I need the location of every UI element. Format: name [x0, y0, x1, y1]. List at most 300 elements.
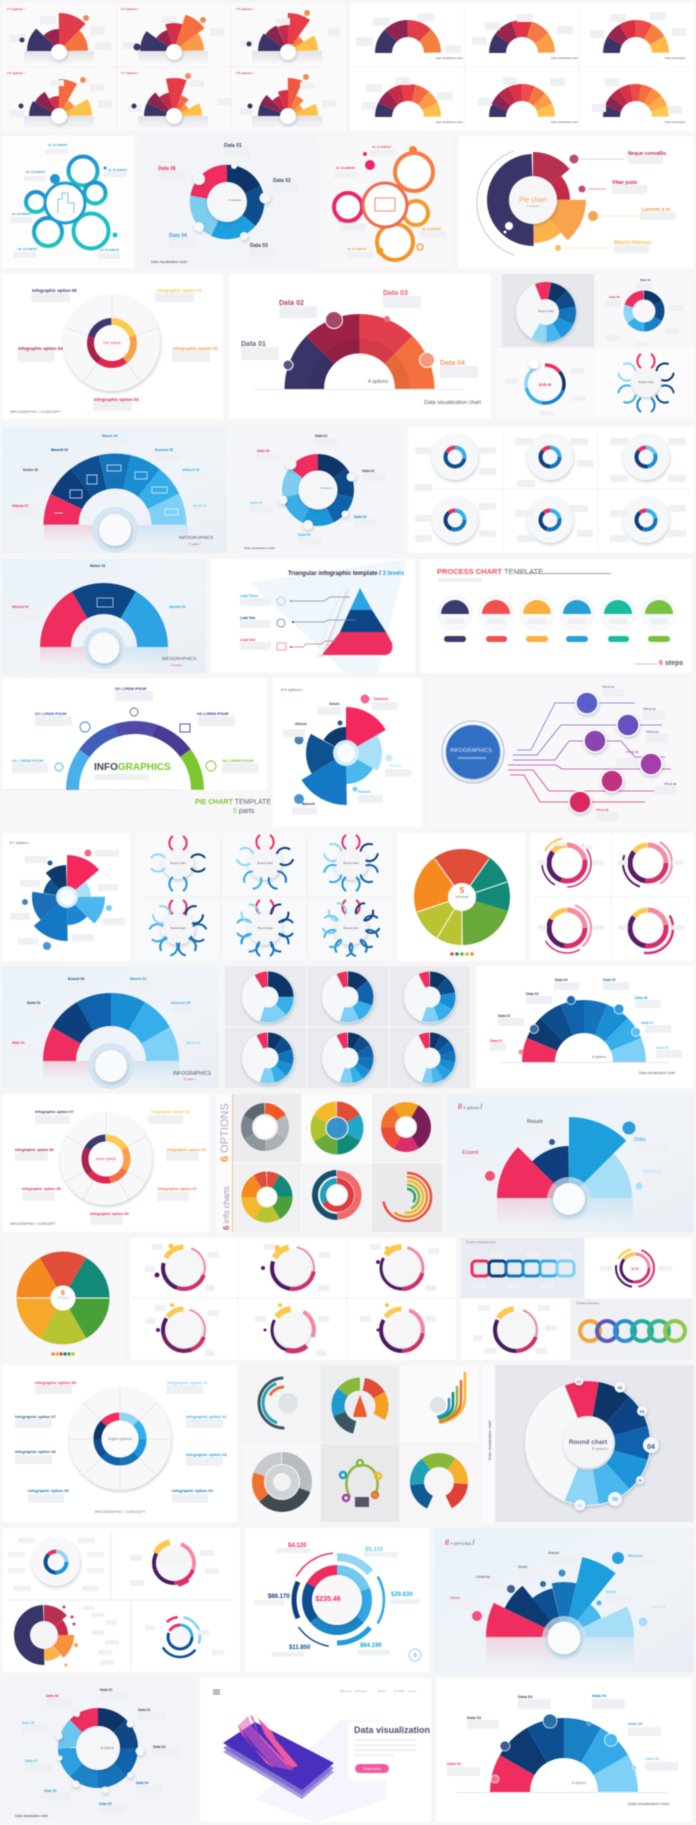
panel: seven part round chart: Data 01	[315, 434, 328, 438]
ring chart 5	[272, 1309, 314, 1351]
panel: four option big rose: // 4 options /	[458, 1104, 482, 1111]
panel: eight option round chart: Data 08	[22, 1721, 35, 1725]
rose chart: 7 options	[155, 97, 193, 135]
panel: pie chart template five parts: 01/ LOREM IPSUM	[12, 759, 43, 763]
panel: seven option big rose: // 7 OPTIONS /	[445, 1540, 474, 1547]
panel: orange bubble diagram: 00. ELEMENT	[336, 166, 356, 170]
panel: six rose half charts: // 6 options /	[7, 71, 25, 75]
panel: radial value chart: $64.190	[360, 1643, 382, 1649]
panel: six part round chart: Data 06	[158, 166, 176, 172]
panel: eight option half donut: Data 02	[498, 1014, 511, 1018]
panel: infographic flow tree: TITLE 04	[626, 750, 639, 754]
chart: gray segments	[246, 1108, 284, 1146]
panel: six part half donut with icons: Morbi 06	[186, 1041, 200, 1045]
half donut: 8 segments	[612, 92, 660, 142]
round chart 4 options	[330, 979, 366, 1015]
panel: six half donuts: Data visualization	[665, 56, 686, 60]
panel: round chart seven options: 06	[612, 1497, 618, 1503]
panel: eight option half donut: 8 options	[592, 1055, 606, 1059]
panel: four multi ring charts	[530, 833, 694, 961]
panel: radial value chart: 6	[413, 1653, 417, 1659]
panel: coloured rings chain	[571, 1299, 692, 1360]
panel: seven part half donut with icons: Affluent 06	[182, 468, 200, 472]
panel: ring chart single	[585, 1238, 692, 1298]
chart: globe segments	[318, 1110, 356, 1146]
panel: eight option circle concept: Infographic option 07	[15, 1414, 56, 1419]
panel: six option half donut: 6 options	[572, 1781, 586, 1785]
panel: three part half donut: Nassib 03	[169, 605, 185, 609]
panel: eight option half donut: Data 07	[641, 1021, 654, 1025]
ring chart 2	[272, 1247, 314, 1289]
panel: five option circle concept: Infographic option 02	[173, 346, 218, 351]
multi ring chart 1	[542, 838, 592, 888]
panel: triangular infographic: Lead Three	[240, 594, 258, 598]
panel: six part round chart: Data visualization chart	[151, 260, 187, 264]
panel: six part half donut with icons: Nibh 01	[12, 1041, 25, 1045]
panel: four small chart variants	[2, 1528, 240, 1672]
panel: six option donut small: Data 01	[640, 278, 651, 282]
panel: five option circle concept: INFOGRAPHIC / CONCEPT	[10, 409, 61, 414]
ring: 5 arcs	[236, 835, 294, 891]
panel: four option big rose: Eissent	[462, 1150, 479, 1156]
panel: three part half donut	[2, 559, 206, 696]
panel: eight option circle concept: Infographic option 06	[15, 1449, 56, 1454]
panel: data visualization landing page: Services	[355, 1689, 367, 1693]
donut: option 5	[636, 448, 656, 466]
donut: option 8	[636, 510, 656, 530]
panel: seven part round chart: 6 options	[320, 486, 333, 490]
panel: orange bubble diagram: 00. ELEMENT	[372, 145, 392, 149]
panel: six part half donut with icons: Nulla 02	[27, 1001, 40, 1005]
panel: data visualization landing page: About us	[340, 1689, 352, 1693]
panel: radial value chart: $11.850	[289, 1645, 311, 1651]
chart: petals	[249, 1179, 285, 1215]
flow nodes	[569, 692, 662, 813]
panel: pie chart template five parts: 5 parts	[233, 808, 255, 815]
panel: five option circle concept: Infographic option 01	[157, 288, 202, 293]
half donut: 6 segments warm	[384, 92, 432, 142]
panel: six option donut small: Data 06	[609, 295, 620, 299]
rose chart: 6 options	[269, 32, 307, 70]
mini blue rings	[160, 1617, 200, 1657]
panel: pie chart template five parts: 02/ LOREM IPSUM	[35, 712, 66, 716]
panel: seven part round chart: Data 04	[298, 533, 311, 537]
panel: orange bubble diagram: 00. ELEMENT	[338, 219, 358, 223]
panel: seven part half donut with icons: Morbi 07	[193, 504, 207, 508]
half donut: 4 segments	[384, 28, 432, 78]
panel: pie chart template five parts: INFOGRAPHICS	[94, 762, 171, 773]
panel: six infographic vector charts: 6 info charts	[222, 1186, 231, 1230]
ring: 8 arcs	[237, 900, 293, 956]
panel: eight option circle concept: Eight options	[108, 1436, 132, 1441]
panel: four option half donut: Data visualization chart	[424, 400, 481, 406]
panel: radial value chart: $29.830	[391, 1592, 413, 1598]
multi ring chart 3	[542, 903, 592, 953]
panel: eight option circle concept: Infographic option 01	[167, 1380, 208, 1385]
panel: infographic flow tree: TITLE 06	[596, 808, 609, 812]
panel: three part half donut: Athena 01	[12, 605, 29, 609]
panel: six half donuts: Data visualization chart	[436, 56, 463, 60]
panel: four option half donut	[229, 274, 491, 444]
panel: pie chart with callouts: Vitae justo	[612, 180, 637, 186]
pyramid	[317, 588, 392, 655]
panel: six half donuts: Data visualization chart	[551, 56, 578, 60]
panel: six half donuts: Data visualization chart	[551, 120, 578, 124]
panel: eight option circle concept: Infographic option 05	[28, 1488, 69, 1493]
panel: data visualization landing page: Data visualization	[354, 1725, 430, 1735]
panel: seven part round chart	[233, 427, 402, 553]
panel: six rose half charts	[2, 3, 350, 135]
panel: process chart template: 6 steps	[659, 660, 683, 667]
panel: five option petal circle	[397, 833, 525, 961]
panel: data visualization landing page: Read more	[363, 1767, 381, 1771]
panel: round chart seven options: Round chart	[569, 1439, 608, 1446]
panel: seven part half donut with icons: Atlanta 01	[12, 504, 28, 508]
panel: seven part half donut with icons: / 7 parts /	[188, 542, 201, 546]
donut chart	[198, 174, 256, 230]
panel: pie chart with callouts	[458, 136, 694, 268]
panel: five option circle concept: Five options	[103, 341, 121, 345]
ring chart 3	[381, 1247, 423, 1289]
panel: arc ring chart small: Round chart	[638, 380, 654, 384]
chart: dark rings with map	[259, 1378, 309, 1428]
donut: option 7	[540, 510, 560, 530]
panel: pie chart template five parts: 03/ LOREM IPSUM	[115, 687, 146, 691]
chart: gear	[258, 1458, 306, 1506]
panel: six part half donut with icons: Essent 03	[68, 977, 84, 981]
panel: round chart seven options: Data visualization chart	[488, 1420, 492, 1460]
panel: seven part round chart: Data visualization chart	[244, 546, 275, 550]
panel: six option circle concept: INFOGRAPHIC / CONCEPT	[10, 1222, 56, 1226]
panel: chain links	[461, 1238, 584, 1298]
panel: pie chart with callouts: Mauris rhoncus	[614, 240, 651, 246]
panel: eight option circle concept: INFOGRAPHIC / CONCEPT	[95, 1509, 146, 1514]
panel: six option circle concept: Infographic option 01	[151, 1110, 190, 1114]
panel: round chart seven options: 03	[640, 1409, 645, 1414]
half donut: 5 segments	[498, 28, 546, 78]
panel: six part round chart: Data 01	[224, 143, 242, 149]
panel: eight option circle concept	[2, 1365, 237, 1522]
panel: eight option half donut: Data 06	[635, 996, 648, 1000]
panel: six option half donut: Data 01	[447, 1761, 462, 1766]
panel: eight option round chart: Data 02	[138, 1708, 151, 1712]
donut: option 4	[540, 448, 560, 466]
panel: round chart seven options: 05	[638, 1478, 642, 1482]
panel: seven option big rose: Mensum	[628, 1553, 644, 1558]
panel: thin ring chart small: $235.46	[539, 383, 551, 387]
multi ring chart 2	[623, 838, 673, 888]
panel: eight option round chart: Data 07	[25, 1759, 38, 1763]
panel: six option half donut: Data visualization chart	[628, 1801, 670, 1806]
chart: warm segments	[388, 1109, 424, 1145]
rose chart: 5 options	[155, 32, 193, 70]
panel: chain links: Template infographic chain	[466, 1241, 496, 1244]
panel: eight option round chart: Data 04	[136, 1781, 149, 1785]
mini purple ring	[153, 1542, 195, 1584]
panel: six part half donut with icons	[2, 966, 219, 1112]
panel: eight option round chart: Data 01	[100, 1688, 113, 1692]
half donut: 6 segments	[612, 28, 660, 78]
mini eight option circle	[8, 1538, 104, 1591]
panel: eight option round chart: Data 08	[46, 1694, 59, 1698]
panel: process chart template	[420, 559, 692, 673]
panel: six ring arc variants: Round chart	[343, 861, 359, 865]
panel: seven part round chart: Data 02	[362, 469, 375, 473]
rose donut	[506, 174, 560, 226]
panel: infographic flow tree: TITLE 02	[643, 707, 656, 711]
panel: six ring arc variants: Round chart	[343, 926, 359, 930]
panel: eight option half donut: Data 03	[526, 992, 539, 996]
panel: seven option big rose: Mollis	[606, 1589, 616, 1594]
panel: six option circle concept: Infographic option 05	[22, 1187, 61, 1191]
panel: six rose half charts: // 6 options /	[236, 7, 254, 11]
panel: seven part half donut with icons: Mauris 04	[102, 434, 118, 438]
panel: eight option half donut: Data 05	[603, 978, 616, 982]
donut: option 6	[446, 510, 464, 530]
panel: six ring arc variants: Round chart	[257, 926, 273, 930]
panel: pie chart template five parts	[2, 678, 271, 852]
panel: blue bubble diagram: 00. ELEMENT	[12, 212, 32, 216]
panel: five option circle concept: Infographic option 03	[94, 397, 139, 402]
panel: triangular infographic: Triangular infographic template / 3 levels	[288, 571, 405, 577]
panel: eight option half donut: Data 08	[656, 1046, 669, 1050]
panel: six option rose: Athens	[295, 722, 307, 726]
round chart 5 options	[412, 979, 448, 1015]
panel: six part round chart: Data 04	[169, 233, 187, 239]
panel: five option circle concept: Infographic option 04	[18, 346, 63, 351]
panel: five option circle concept: Infographic option 05	[32, 288, 77, 293]
panel: radial value chart: $5.110	[365, 1547, 384, 1553]
panel: pie chart with callouts: 4 options	[527, 204, 540, 208]
panel: six rose half charts: // 7 options /	[121, 71, 139, 75]
panel: six infographic vector charts	[215, 1094, 442, 1232]
donut: option 3	[446, 448, 464, 466]
panel: pie chart template five parts: 04/ LOREM IPSUM	[197, 712, 228, 716]
ring: 9 arcs	[322, 900, 380, 957]
panel: six option half donut: Data 05	[628, 1721, 643, 1726]
panel: six infographic vector charts: 6 OPTIONS	[219, 1103, 231, 1162]
chart: world map donut	[417, 1460, 461, 1504]
bubble rings	[26, 156, 108, 248]
panel: round chart seven options: 01	[577, 1380, 581, 1384]
panel: six part half donut with icons: Mauris 04	[130, 977, 146, 981]
panel: eight option round chart: Data 06	[44, 1789, 57, 1793]
panel: round chart seven options: 07	[578, 1503, 583, 1508]
connector lines	[508, 703, 671, 802]
panel: five option circle concept	[2, 274, 223, 419]
panel: four option half donut: Data 03	[383, 290, 408, 297]
panel: six option circle concept: Seven options	[96, 1157, 117, 1161]
panel: three part half donut: Molior 02	[90, 564, 105, 568]
panel: three part half donut: / 3 parts /	[170, 663, 183, 667]
panel: eight option round chart	[2, 1678, 194, 1822]
panel: five option petal circle: 5	[460, 886, 465, 895]
panel: blue bubble diagram: 00. ELEMENT	[108, 168, 128, 172]
rose chart: 8 options	[269, 97, 307, 135]
panel: six option donut small	[595, 274, 694, 347]
ring chart 6	[381, 1309, 423, 1351]
panel: data visualization landing page: Log in	[408, 1689, 417, 1693]
panel: eight option circle concept: Infographic option 04	[172, 1488, 213, 1493]
panel: single purple ring	[461, 1299, 570, 1360]
panel: seven option big rose	[434, 1528, 694, 1678]
panel: six option petal circle: OPTIONS	[57, 1296, 69, 1300]
panel: six option rose: Panoris	[358, 790, 371, 794]
panel: seven part round chart: Data 05	[250, 501, 263, 505]
panel: six ring arc variants: Round chart	[170, 926, 186, 930]
panel: four option big rose: Dapibus	[643, 1169, 662, 1175]
panel: orange bubble diagram: 00. ELEMENT	[422, 227, 442, 231]
panel: seven part half donut with icons: INFOGRAPHICS	[179, 535, 213, 540]
panel: four option half donut: Data 01	[241, 341, 266, 348]
panel: six option half donut	[436, 1678, 692, 1825]
panel: blue bubble diagram: 00. ELEMENT	[48, 143, 68, 147]
panel: seven option rose: // 7 options /	[10, 841, 29, 845]
panel: six option half donut: Data 02	[467, 1715, 482, 1720]
panel: three part half donut: INFOGRAPHICS	[162, 656, 196, 661]
panel: infographic flow tree: TITLE 05	[664, 782, 677, 786]
panel: process chart template: PROCESS CHART TEMPLATE	[437, 567, 543, 576]
panel: four option half donut: Data 04	[440, 360, 465, 367]
round chart 6 options	[250, 1040, 286, 1076]
panel: blue bubble diagram: 00. ELEMENT	[100, 248, 120, 252]
panel: blue bubble diagram	[2, 136, 134, 268]
panel: eight option round chart: Data 03	[153, 1745, 166, 1749]
donut chart	[90, 322, 134, 364]
panel: triangular infographic: Lead One	[240, 638, 256, 642]
panel: thin ring chart small	[496, 348, 594, 419]
ring: 4 arcs	[151, 836, 205, 891]
panel: pie chart template five parts: PIE CHART TEMPLATE	[195, 799, 271, 806]
panel: pie chart with callouts: Pie chart	[519, 197, 547, 204]
icons	[55, 708, 216, 771]
panel: six part round chart: 6 options	[229, 198, 242, 202]
panel: six ring arc variants: Round chart	[257, 861, 273, 865]
ring chart 4	[163, 1309, 205, 1351]
panel: pie chart template five parts: 05/ LOREM IPSUM	[222, 759, 253, 763]
step items	[438, 596, 676, 630]
panel: orange bubble diagram: 00. ELEMENT	[347, 247, 367, 251]
panel: seven option big rose: Dolor	[518, 1564, 528, 1569]
panel: six option half donut: Data 03	[518, 1694, 533, 1699]
panel: eight option half donut: Data 01	[490, 1039, 503, 1043]
chart: rainbow bars	[437, 1372, 465, 1423]
chart: concentric arcs	[383, 1173, 431, 1221]
panel: blue bubble diagram: 00. ELEMENT	[26, 170, 46, 174]
round chart 3 options	[250, 979, 286, 1015]
panel: six rose half charts: // 5 options /	[121, 7, 139, 11]
panel: six part half donut with icons: / 6 parts /	[183, 1077, 196, 1081]
chart: red and blue rings	[315, 1173, 359, 1217]
panel: pie chart with callouts: Laoreet a in	[642, 207, 670, 213]
panel: eight option half donut: Data 04	[555, 978, 568, 982]
panel: seven option big rose: Dapibus	[651, 1604, 666, 1609]
panel: seven option rose	[2, 833, 130, 961]
panel: six option circle concept: Infographic option 02	[167, 1148, 206, 1152]
panel: six option petal circle: 6	[61, 1290, 65, 1297]
panel: seven part half donut with icons: Eusmod 05	[155, 448, 173, 452]
panel: radial value chart: $4.120	[288, 1543, 307, 1549]
panel: six option circle concept: Infographic option 07	[35, 1110, 74, 1114]
panel: six option half donut: Data 04	[592, 1693, 607, 1698]
panel: seven part round chart: Data 03	[354, 515, 367, 519]
panel: triangular infographic	[211, 559, 415, 673]
panel: six small option circles	[408, 427, 694, 553]
panel: arc ring chart small	[595, 348, 694, 419]
panel: data visualization landing page: Contact	[394, 1689, 405, 1693]
panel: radial value chart	[245, 1528, 429, 1672]
panel: four option big rose	[447, 1094, 694, 1238]
panel: round chart small	[502, 274, 594, 347]
panel: data visualization landing page: News	[378, 1689, 386, 1693]
panel: six option rose: Selum	[329, 702, 340, 706]
multi ring chart 4	[623, 903, 673, 953]
panel: eight option round chart: Data 05	[99, 1802, 112, 1806]
panel: six ring charts purple	[130, 1238, 456, 1360]
panel: infographic flow tree: INFOGRAPHICS	[450, 748, 492, 754]
panel: six half donuts	[350, 3, 694, 142]
panel: eight option half donut	[476, 966, 694, 1108]
ring: 7 arcs	[149, 900, 207, 957]
panel: six part round chart: Data 02	[273, 178, 291, 184]
panel: six rose half charts: // 8 options /	[236, 71, 254, 75]
panel: four option half donut: 4 options	[368, 379, 389, 385]
panel: six half donuts: Data visualization chart	[436, 120, 463, 124]
panel: five option petal circle: OPTIONS	[455, 895, 469, 899]
round chart 7 options	[330, 1040, 366, 1076]
chart: bulb	[340, 1460, 381, 1501]
chart: rocket horseshoe	[338, 1384, 382, 1428]
panel: six option rose: Portico	[390, 764, 402, 768]
panel: four option big rose: Dolor	[634, 1137, 646, 1143]
rose chart: 6 options variant	[40, 98, 78, 134]
panel: four option big rose: Rosum	[527, 1119, 543, 1125]
panel: six option half donut: Data 06	[645, 1756, 660, 1761]
panel: six option rose: Dolorem	[374, 697, 388, 701]
panel: triangular infographic: Lead Two	[240, 616, 255, 620]
panel: six part half donut with icons: Dolorum 05	[171, 1001, 190, 1005]
ring: 6 arcs	[322, 835, 380, 891]
round chart 8 options	[412, 1040, 448, 1076]
panel: six option circle concept: Infographic option 03	[158, 1187, 197, 1191]
panel: eight option half donut: Data visualization chart	[639, 1071, 675, 1075]
panel: ring chart single: $235	[631, 1267, 639, 1271]
panel: seven option big rose: Solum	[548, 1550, 560, 1555]
rose chart: 4 options	[40, 32, 78, 70]
panel: seven option big rose: Ceteros	[476, 1574, 490, 1579]
panel: six half donuts: Data visualization	[665, 120, 686, 124]
half donut	[304, 334, 415, 444]
panel: six round chart variants	[225, 966, 470, 1088]
panel: six ring arc variants: Round chart	[170, 861, 186, 865]
panel: radial value chart: $66.170	[268, 1594, 290, 1600]
panel: four option half donut: Data 02	[279, 300, 304, 307]
panel: radial value chart: $235.46	[315, 1596, 341, 1603]
isometric device	[223, 1715, 334, 1799]
panel: six option petal circle	[2, 1238, 125, 1360]
panel: eight option round chart: Data visualization chart	[15, 1814, 48, 1818]
panel: eight option round chart: 8 options	[101, 1746, 114, 1750]
panel: eight option circle concept: Infographic option 08	[35, 1380, 76, 1385]
panel: orange bubble diagram	[321, 136, 453, 268]
panel: seven option big rose: Ullum	[450, 1595, 461, 1600]
panel: coloured rings chain: Template infographic	[576, 1302, 600, 1305]
panel: six part half donut with icons: INFOGRAPHICS	[173, 1071, 212, 1077]
panel: six part round chart: Data 03	[250, 243, 268, 249]
panel: six option circle concept: Infographic option 06	[15, 1148, 54, 1152]
panel: six option circle concept	[2, 1094, 209, 1232]
panel: seven part round chart: Data 06	[257, 449, 270, 453]
